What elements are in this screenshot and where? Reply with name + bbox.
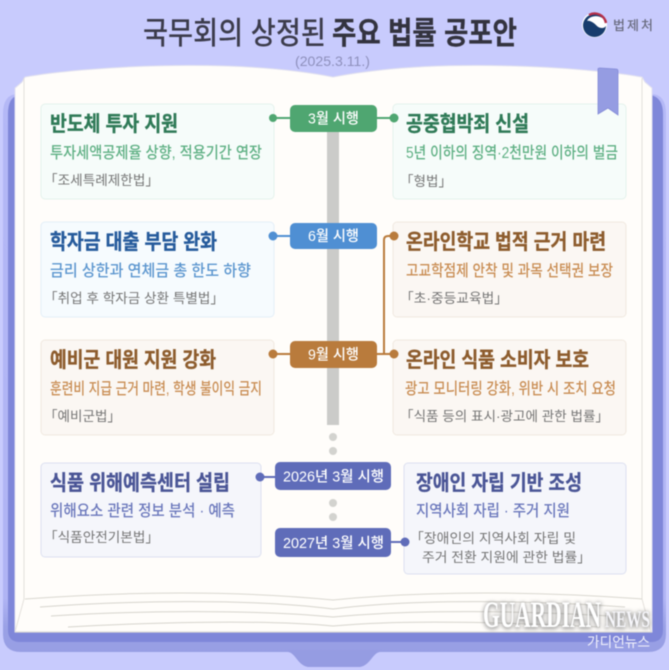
connector: March: [269, 114, 398, 122]
panel: food hazard center: [41, 463, 261, 557]
law name: 「취업 후 학자금 상환 특별법」: [44, 291, 224, 306]
heading: 온라인학교 법적 근거 마련: [406, 231, 606, 254]
connector: March 2027: [388, 538, 410, 546]
ministry name: 법제처: [613, 18, 653, 33]
law name: 주거 전환 지원에 관한 법률」: [422, 550, 591, 565]
panel: reserve forces support: [41, 340, 274, 435]
pill: March: [290, 105, 377, 132]
connector: June: [268, 232, 292, 240]
panel: public threat crime: [393, 104, 626, 199]
heading: 온라인 식품 소비자 보호: [406, 349, 589, 372]
pill: March: 3월 시행: [308, 110, 359, 128]
law name: 「형법」: [400, 174, 452, 189]
pill: March 2026: 2026년 3월 시행: [283, 468, 384, 486]
description: 5년 이하의 징역·2천만원 이하의 벌금: [406, 144, 618, 162]
pill: June: 6월 시행: [308, 228, 359, 245]
icon: taegeuk emblem: [582, 12, 607, 38]
title: 국무회의 상정된: [143, 16, 326, 51]
description: 훈련비 지급 근거 마련, 학생 불이익 금지: [50, 380, 262, 398]
title: [143, 16, 517, 51]
timeline bar: [327, 125, 339, 425]
heading: 학자금 대출 부담 완화: [50, 231, 217, 254]
pill: September: 9월 시행: [308, 346, 359, 364]
connector: March 2026: [256, 472, 280, 482]
title: 주요 법률 공포안: [332, 16, 517, 51]
connector: September: [268, 232, 398, 358]
law name: [410, 531, 591, 565]
panel: semiconductor investment: [41, 104, 274, 199]
pill: September: [290, 341, 377, 368]
heading: 반도체 투자 지원: [50, 113, 178, 136]
pill: March 2027: 2027년 3월 시행: [283, 535, 384, 552]
heading: 장애인 자립 기반 조성: [416, 472, 582, 495]
law name: 「장애인의 지역사회 자립 및: [410, 531, 576, 546]
timeline dots: [329, 433, 337, 521]
heading: 공중협박죄 신설: [406, 113, 529, 136]
description: 위해요소 관련 정보 분석 · 예측: [50, 502, 235, 520]
panel: student loan relief: [41, 222, 274, 317]
panel: independent living for disabled: [404, 463, 626, 574]
law name: 「조세특례제한법」: [44, 173, 159, 188]
law name: 「식품안전기본법」: [44, 530, 159, 545]
law name: 「예비군법」: [44, 409, 121, 424]
pill: March 2026: [275, 462, 391, 490]
watermark: [483, 595, 650, 650]
description: 금리 상한과 연체금 총 한도 하향: [50, 262, 251, 280]
description: 지역사회 자립 · 주거 지원: [416, 502, 570, 520]
icon: bookmark: [598, 68, 618, 115]
panel: online school: [393, 222, 626, 317]
heading: 식품 위해예측센터 설립: [50, 472, 230, 495]
date: (2025.3.11.): [295, 53, 370, 69]
description: 투자세액공제율 상향, 적용기간 연장: [50, 144, 262, 162]
law name: 「초·중등교육법」: [400, 291, 508, 306]
pill: March 2027: [275, 528, 391, 557]
heading: 예비군 대원 지원 강화: [50, 349, 216, 372]
pill: June: [290, 223, 377, 249]
watermark: Korean: 가디언뉴스: [587, 634, 650, 650]
panel: online food consumers: [393, 340, 626, 435]
description: 고교학점제 안착 및 과목 선택권 보장: [406, 262, 613, 280]
description: 광고 모니터링 강화, 위반 시 조치 요청: [405, 380, 616, 398]
ministry logo: [582, 12, 653, 38]
law name: 「식품 등의 표시·광고에 관한 법률」: [400, 409, 609, 424]
